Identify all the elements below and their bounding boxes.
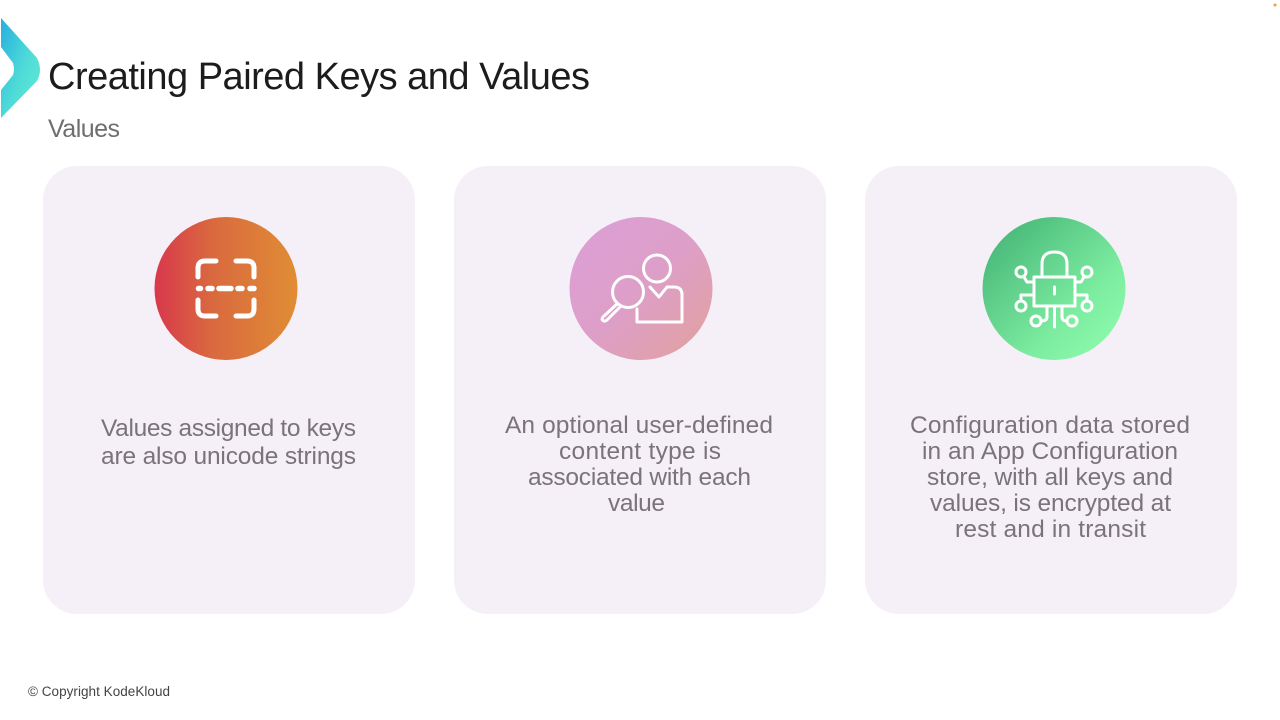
text: encrypted configuration: store, with all keys and bbox=[927, 464, 1173, 491]
icon: scan frame bbox=[154, 217, 298, 360]
status dot bbox=[1274, 4, 1276, 6]
text: content type: content type is bbox=[559, 438, 721, 465]
icon: person with magnifier bbox=[570, 217, 712, 360]
footer copyright: © Copyright KodeKloud bbox=[28, 684, 170, 699]
text: unicode strings bbox=[101, 415, 356, 470]
panel: content type bbox=[454, 166, 826, 614]
text: content type: An optional user-defined bbox=[505, 412, 773, 439]
text: encrypted configuration: values, is encrypted at bbox=[930, 490, 1171, 517]
text: content type: value bbox=[608, 490, 665, 517]
text: unicode strings: Values assigned to keys bbox=[101, 415, 356, 442]
text: encrypted configuration: in an App Configuration bbox=[922, 438, 1178, 465]
text: encrypted configuration bbox=[910, 412, 1190, 543]
text: encrypted configuration: rest and in transit bbox=[955, 516, 1146, 543]
text: unicode strings: are also unicode strings bbox=[101, 443, 356, 470]
text: content type bbox=[505, 412, 773, 517]
text: content type: associated with each bbox=[528, 464, 751, 491]
logo chevron bbox=[1, 18, 40, 118]
panel: unicode strings bbox=[43, 166, 415, 614]
subtitle: Values bbox=[48, 115, 120, 143]
text: encrypted configuration: Configuration data stored bbox=[910, 412, 1190, 439]
icon: circuit lock bbox=[982, 217, 1126, 360]
title: Creating Paired Keys and Values bbox=[48, 56, 590, 98]
panel: encrypted configuration bbox=[865, 166, 1237, 614]
